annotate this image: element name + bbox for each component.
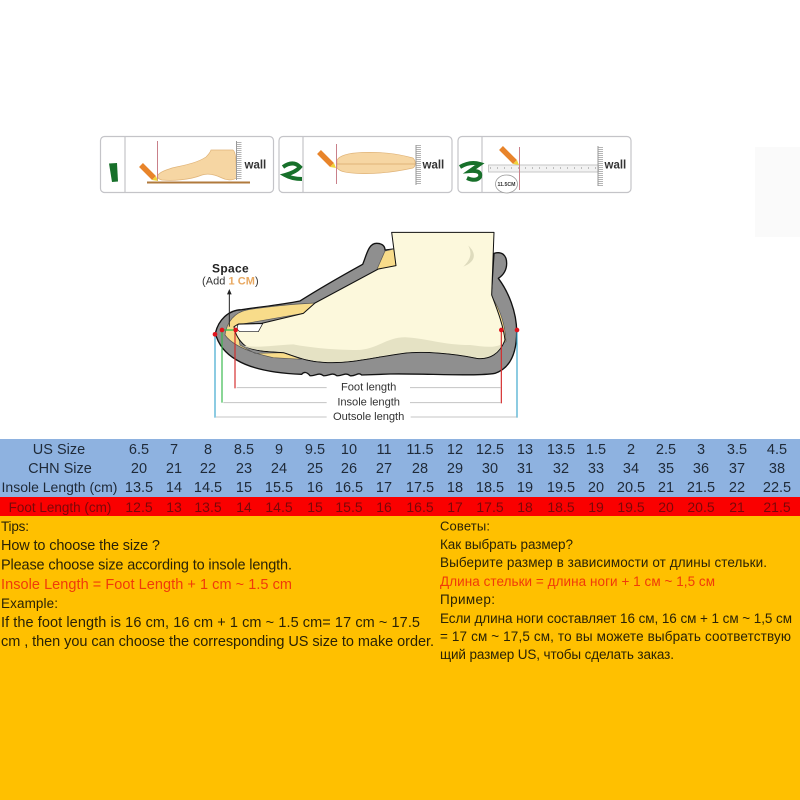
icon: wall [598,146,600,186]
row: insole length: 17 [376,480,392,496]
row: foot length: 14 [236,499,252,515]
icon: measurement circle [496,175,518,193]
icon: pencil [141,165,158,181]
row: insole length: 21 [658,480,674,496]
Russian tips text: Если длина ноги составляет 16 см, 16 см + 1 см ~ 1,5 см [440,611,792,626]
icon: base board [147,182,250,184]
row: CHN size: 26 [341,461,357,477]
green space line [222,328,236,332]
foot shading [243,337,502,362]
row: US size: 6.5 [129,442,149,458]
row: US size: 10 [341,442,357,458]
row: foot length: 13.5 [194,499,222,515]
English tips text: Example: [1,596,58,611]
English tips text [1,519,434,650]
row: foot length: 18 [517,499,533,515]
row: foot length: 17 [447,499,463,515]
row: foot length: 15 [307,499,323,515]
row: foot length: Foot Length (cm) [9,500,111,515]
row: US size: US Size [33,442,85,458]
insole length dimension: Insole length [337,396,400,408]
row: foot length: 13 [166,499,182,515]
foot length dimension: Foot length [341,382,396,394]
row: foot length: 17.5 [476,499,504,515]
row: insole length: Insole Length (cm) [2,479,117,495]
Russian tips text [440,518,792,662]
icon: number 1 [109,163,118,182]
row: US size: 12.5 [476,442,504,458]
row: CHN size: 36 [693,461,709,477]
row: insole length: 18 [447,480,463,496]
Russian tips text: Как выбрать размер? [440,537,573,552]
panel: step 3 read ruler [458,136,631,193]
row: foot length: 21 [729,499,745,515]
measure lines [213,328,519,418]
icon: number 3 [460,163,480,180]
Russian tips text: щий размер US, чтобы сделать заказ. [440,647,674,662]
row: CHN size: 35 [658,461,674,477]
row: CHN size: 33 [588,461,604,477]
Russian tips text: = 17 см ~ 17,5 см, то вы можете выбрать соответствую [440,629,791,644]
row: insole length: 18.5 [476,480,504,496]
insole yellow [225,303,315,359]
row: foot length: 19 [588,499,604,515]
row: foot length: 21.5 [763,499,791,515]
row: US size: 8.5 [234,442,254,458]
space arrow [227,289,232,327]
row: US size: 3.5 [727,442,747,458]
measurement value: 11.5CM [498,182,516,188]
panel: step 2 measure foot top view [279,136,452,192]
row: insole length: 17.5 [406,480,434,496]
row: US size: 8 [204,442,212,458]
English tips text: cm , then you can choose the corresponding US size to make order. [1,634,434,650]
Russian tips text: Советы: [440,518,490,534]
row: CHN size: 30 [482,461,498,477]
icon: ruler [488,165,598,172]
row: insole length: 15 [236,480,252,496]
row: US size: 2 [627,442,635,458]
outsole length dimension: Outsole length [333,411,404,423]
row: insole length: 22 [729,480,745,496]
wall label: wall [604,160,626,172]
row: insole length: 14.5 [194,480,222,496]
space note: (Add 1 CM) [202,275,259,287]
icon: red guide line [336,144,338,184]
row: insole length: 19.5 [547,480,575,496]
row: insole length: 13.5 [125,480,153,496]
foot [234,232,505,363]
English tips text: Insole Length = Foot Length + 1 cm ~ 1.5 cm [1,577,292,593]
row: US size: 9.5 [305,442,325,458]
row: foot length: 20.5 [687,499,715,515]
Russian tips text: Длина стельки = длина ноги + 1 см ~ 1,5 см [440,574,715,589]
icon: red guide line [156,141,158,181]
icon: pencil [501,148,519,165]
row: US size: 13 [517,442,533,458]
row: CHN size: 38 [769,461,785,477]
size table [0,439,800,516]
row: CHN size: 29 [447,461,463,477]
row: insole length: 15.5 [265,480,293,496]
row: CHN size: 24 [271,461,287,477]
shoe cross-section diagram [202,232,519,423]
row: US size: 11.5 [406,442,434,458]
row: insole length: 21.5 [687,480,715,496]
row: insole length: 16 [307,480,323,496]
row: CHN size: 25 [307,461,323,477]
row: US size: 3 [697,442,705,458]
English tips text: Please choose size according to insole length. [1,558,292,574]
space heading: Space [212,261,249,275]
row: CHN size: CHN Size [28,461,92,477]
big toe nail [237,324,263,332]
English tips text: If the foot length is 16 cm, 16 cm + 1 cm ~ 1.5 cm= 17 cm ~ 17.5 [1,615,420,631]
row: insole length: 19 [517,480,533,496]
shoe sole and upper [215,243,517,376]
Russian tips text: Пример: [440,592,495,607]
row: foot length: 16.5 [406,499,434,515]
row: CHN size: 32 [553,461,569,477]
icon: wall [416,145,418,185]
row: foot length: 20 [658,499,674,515]
row: foot length: 15.5 [335,499,363,515]
row: US size: 7 [170,442,178,458]
row: foot length: 16 [376,499,392,515]
icon: top view foot [337,152,415,174]
row: US size: 4.5 [767,442,787,458]
row: US size: 9 [275,442,283,458]
panel: orange tips background [0,516,800,800]
row: foot length: 14.5 [265,499,293,515]
wall label: wall [244,160,266,172]
row: CHN size: 27 [376,461,392,477]
row: insole length: 14 [166,480,182,496]
row: CHN size: 34 [623,461,639,477]
row: CHN size: 20 [131,461,147,477]
row: foot length: 18.5 [547,499,575,515]
icon: wall [236,141,239,180]
row: US size: 2.5 [656,442,676,458]
row: CHN size: 28 [412,461,428,477]
icon: number 2 [283,164,302,179]
row: CHN size: 22 [200,461,216,477]
row: insole length: 20.5 [617,480,645,496]
row: insole length: 20 [588,480,604,496]
row: foot length: 19.5 [617,499,645,515]
row: CHN size: 21 [166,461,182,477]
icon: red guide line [518,147,520,190]
row: CHN size: 31 [517,461,533,477]
icon: side view foot [158,150,236,180]
row: insole length: 22.5 [763,480,791,496]
English tips text: How to choose the size ? [1,538,160,554]
Russian tips text: Выберите размер в зависимости от длины стельки. [440,555,767,570]
English tips text: Tips: [1,519,29,534]
row: insole length: 16.5 [335,480,363,496]
row: US size: 13.5 [547,442,575,458]
row: CHN size: 23 [236,461,252,477]
row: US size: 1.5 [586,442,606,458]
panel: step 1 measure foot side view [100,136,274,192]
icon: pencil [319,152,336,168]
row: US size: 12 [447,442,463,458]
row: CHN size: 37 [729,461,745,477]
row: US size: 11 [376,442,392,458]
row: foot length: 12.5 [125,499,153,515]
wall label: wall [422,160,444,172]
